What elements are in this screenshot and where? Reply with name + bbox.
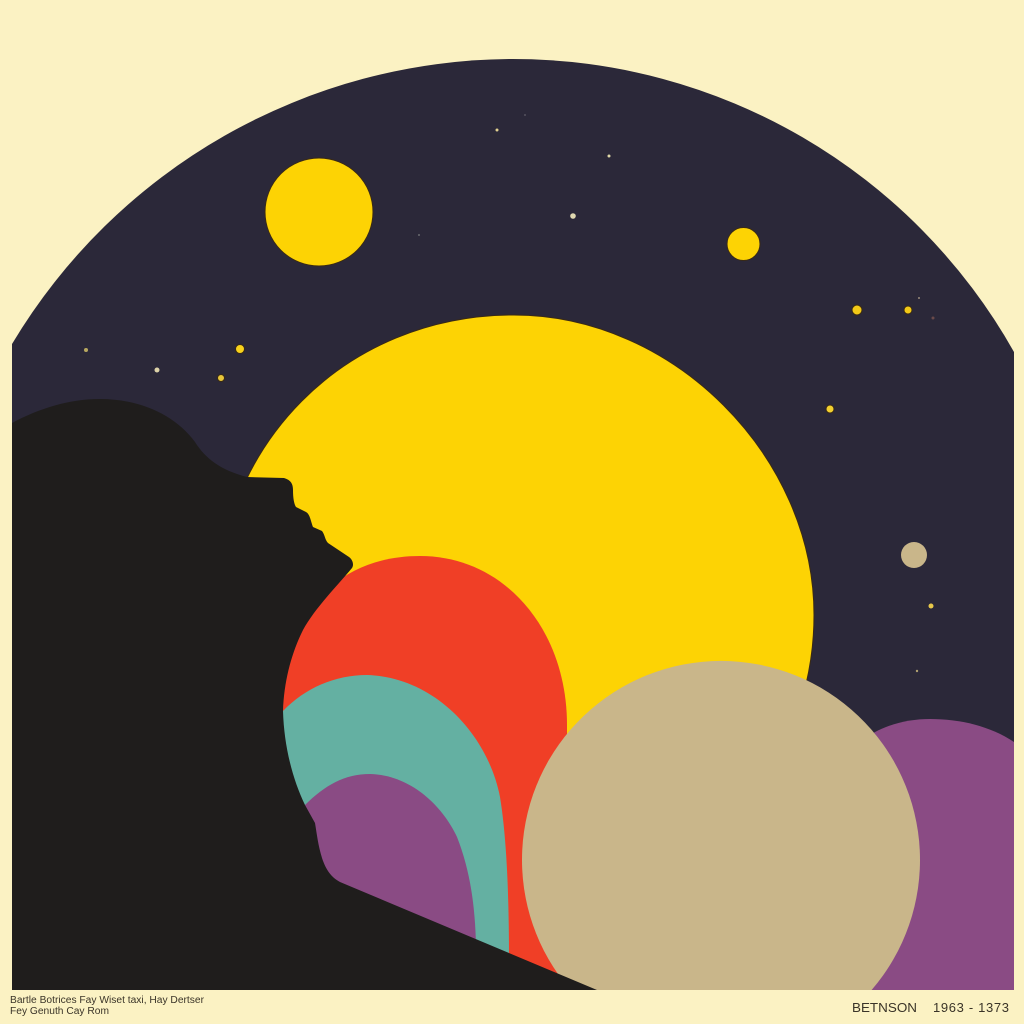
large yellow sun (216, 315, 814, 915)
purple arch (300, 774, 476, 945)
credit: bottom right (852, 1000, 1009, 1015)
moon: large yellow (265, 158, 373, 266)
caption: bottom left: Fey Genuth Cay Rom (10, 1006, 109, 1017)
black silhouette profile (12, 399, 597, 990)
caption: bottom left: Bartle Botrices Fay Wiset taxi, Hay Dertser (10, 995, 205, 1006)
caption: bottom left (10, 995, 205, 1017)
moon: small yellow (727, 228, 760, 260)
red arch (270, 556, 567, 985)
stars (84, 114, 934, 672)
purple hill at right (860, 719, 1014, 990)
moon: tan (901, 542, 927, 568)
credit: bottom right: BETNSON (852, 1000, 917, 1015)
tan planet (522, 661, 920, 990)
credit: bottom right: 1963 - 1373 (933, 1000, 1009, 1015)
teal arch (283, 675, 509, 960)
